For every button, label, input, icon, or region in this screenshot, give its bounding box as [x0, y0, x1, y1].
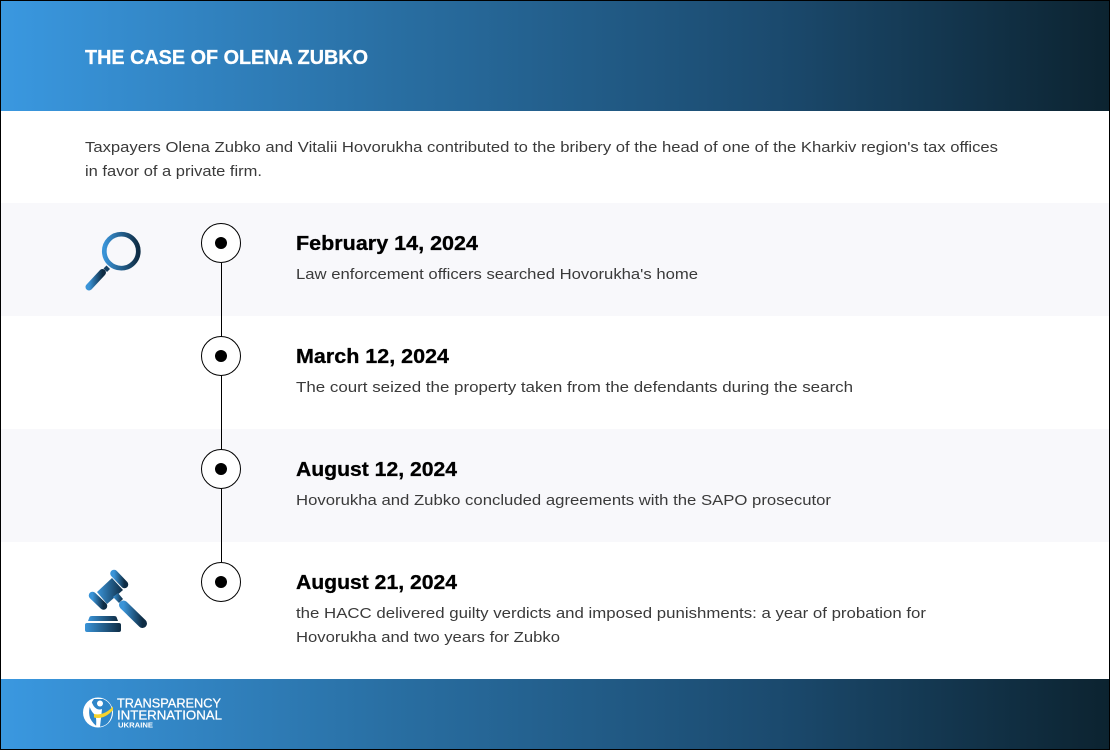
description 1: Law enforcement officers searched Hovorukha's home: [296, 266, 698, 283]
description 3: Hovorukha and Zubko concluded agreements with the SAPO prosecutor: [296, 492, 831, 509]
timeline event: August 12, 2024: [202, 450, 831, 509]
timeline marker 2: [202, 336, 240, 376]
logo: Transparency International Ukraine: UKRAINE: [118, 722, 153, 730]
date 4: August 21, 2024: [296, 572, 458, 594]
date 1: February 14, 2024: [296, 233, 479, 255]
description 4: Hovorukha and two years for Zubko: [296, 629, 560, 646]
footer band: [1, 679, 1109, 749]
intro text: [85, 139, 998, 180]
timeline event: August 21, 2024: [202, 562, 926, 646]
panel: row 1 background: [1, 203, 1109, 316]
timeline marker 1: [202, 224, 240, 262]
date 2: March 12, 2024: [296, 346, 450, 368]
date 3: August 12, 2024: [296, 459, 458, 481]
description 4: [296, 605, 926, 646]
header band: [1, 1, 1109, 111]
timeline event: March 12, 2024: [202, 336, 853, 396]
timeline marker 3: [202, 450, 240, 488]
timeline connector line: [221, 263, 222, 562]
icon: judge gavel: [85, 574, 142, 632]
description 2: The court seized the property taken from the defendants during the search: [296, 379, 853, 396]
panel: row 3 background: [1, 429, 1109, 542]
logo: Transparency International Ukraine: [83, 696, 222, 730]
logo: Transparency International Ukraine: INTERNATIONAL: [117, 708, 222, 722]
intro text: Taxpayers Olena Zubko and Vitalii Hovorukha contributed to the bribery of the head of one of the Kharkiv region's tax offices: [85, 139, 998, 156]
icon: magnifying glass: [89, 234, 138, 287]
timeline marker 4: [202, 562, 240, 602]
description 4: the HACC delivered guilty verdicts and imposed punishments: a year of probation for: [296, 605, 926, 622]
logo globe: [83, 698, 113, 728]
logo: Transparency International Ukraine: TRANSPARENCY: [117, 696, 222, 710]
title: THE CASE OF OLENA ZUBKO: [85, 47, 368, 69]
timeline event: February 14, 2024: [202, 224, 698, 283]
intro text: in favor of a private firm.: [85, 163, 262, 180]
